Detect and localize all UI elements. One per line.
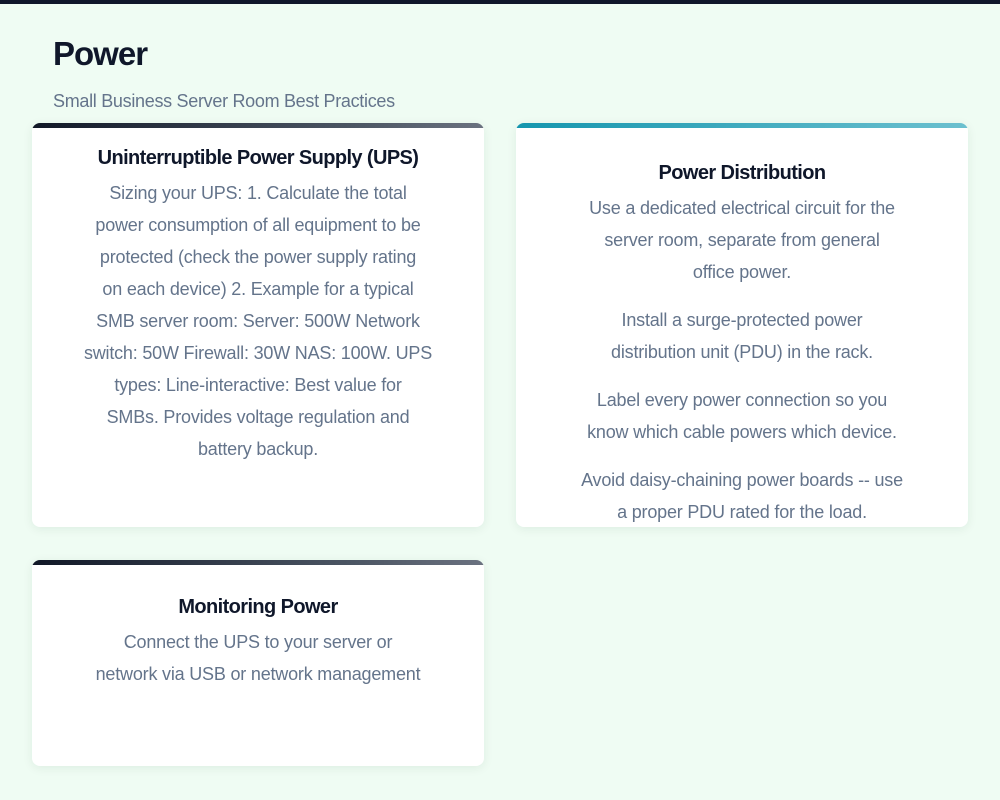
text: UPS sizing: power consumption of all equipment to be — [95, 215, 421, 235]
text: monitoring — [96, 632, 420, 684]
text: UPS sizing: types: Line-interactive: Best value for — [114, 375, 402, 395]
panel: Monitoring Power — [32, 560, 484, 766]
text: UPS sizing: battery backup. — [198, 439, 318, 459]
heading: Power Distribution: Power Distribution — [658, 162, 825, 184]
text: distribution tips: server room, separate from general — [604, 230, 880, 250]
text: UPS sizing — [84, 183, 432, 459]
text: monitoring: network via USB or network management — [96, 664, 420, 684]
heading: UPS: Uninterruptible Power Supply (UPS) — [98, 147, 418, 169]
title: Power — [53, 35, 147, 72]
text: distribution tips: Label every power connection so you — [597, 390, 887, 410]
text: UPS sizing: protected (check the power supply rating — [100, 247, 416, 267]
text: distribution tips: office power. — [693, 262, 791, 282]
text: distribution tips: Avoid daisy-chaining power boards -- use — [581, 470, 903, 490]
text: distribution tips: Install a surge-protected power — [622, 310, 862, 330]
text: distribution tips — [581, 198, 903, 522]
text: distribution tips: Use a dedicated electrical circuit for the — [589, 198, 895, 218]
panel: UPS — [32, 123, 484, 527]
text: UPS sizing: on each device) 2. Example for a typical — [102, 279, 414, 299]
text: distribution tips: know which cable powers which device. — [587, 422, 897, 442]
text: UPS sizing: SMB server room: Server: 500W Network — [96, 311, 420, 331]
subtitle: Small Business Server Room Best Practices — [53, 91, 395, 111]
panel: Power Distribution — [516, 123, 968, 527]
text: distribution tips: distribution unit (PDU) in the rack. — [611, 342, 873, 362]
text: UPS sizing: Sizing your UPS: 1. Calculate the total — [109, 183, 407, 203]
text: distribution tips: a proper PDU rated for the load. — [617, 502, 867, 522]
heading: Monitoring Power: Monitoring Power — [178, 596, 338, 618]
text: UPS sizing: switch: 50W Firewall: 30W NAS: 100W. UPS — [84, 343, 432, 363]
text: UPS sizing: SMBs. Provides voltage regulation and — [107, 407, 409, 427]
text: monitoring: Connect the UPS to your server or — [124, 632, 392, 652]
